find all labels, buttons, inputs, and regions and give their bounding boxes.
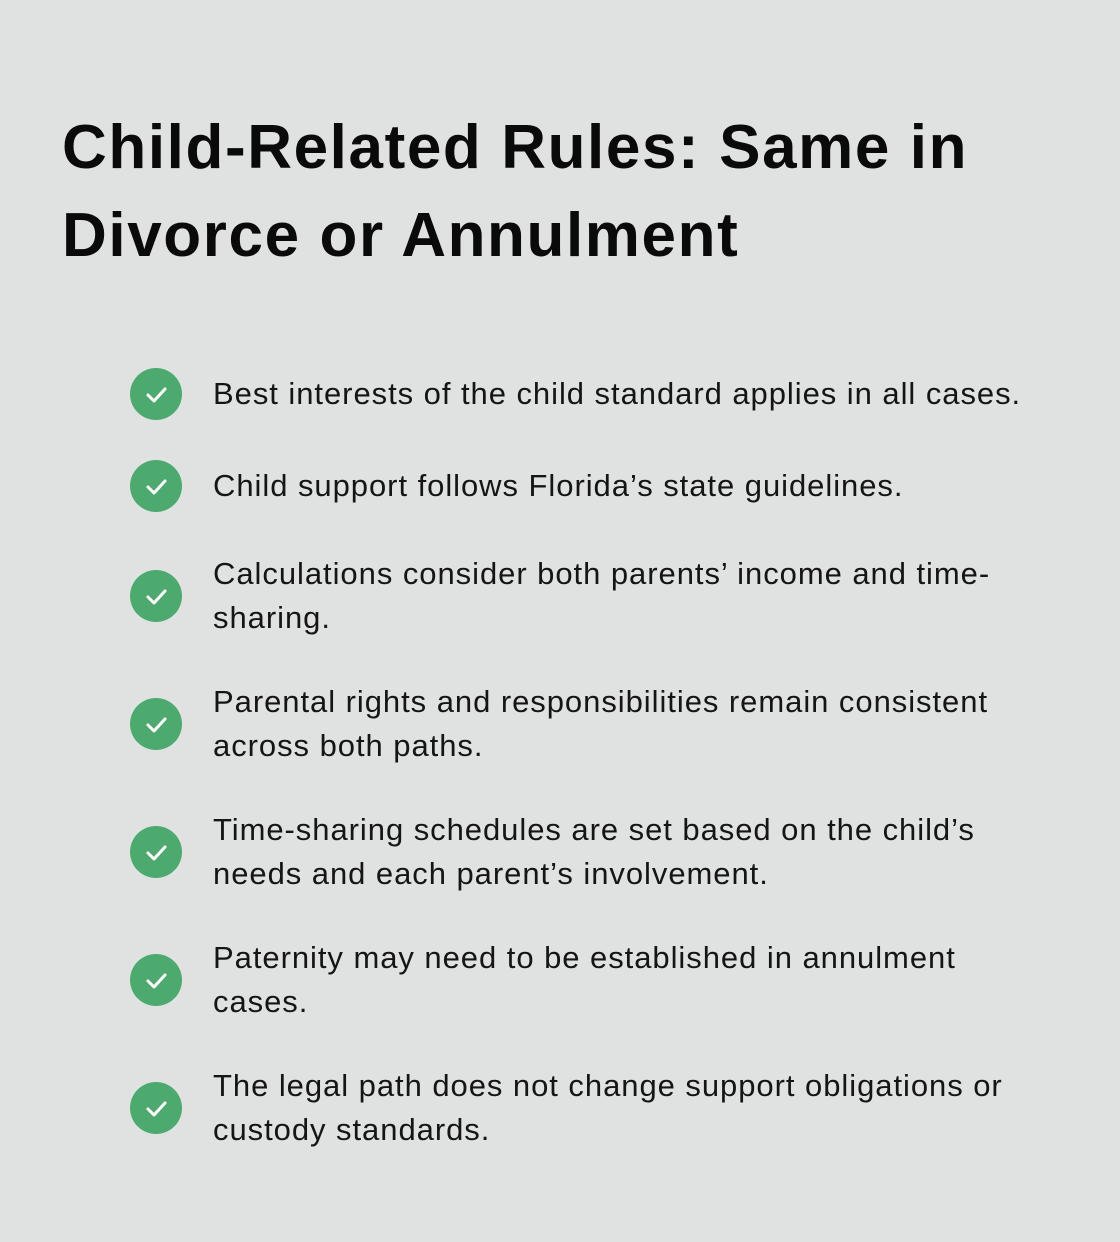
title: Divorce or Annulment [62,201,739,270]
item 4: across both paths. [213,728,483,763]
item 7 [130,1068,1003,1147]
title [62,113,968,270]
item 5: Time-sharing schedules are set based on the child’s [213,812,975,847]
item 4 [130,684,988,763]
item 5: needs and each parent’s involvement. [213,856,769,891]
item 5 [130,812,975,891]
item 6: Paternity may need to be established in annulment [213,940,956,975]
item 1: Best interests of the child standard applies in all cases. [213,376,1021,411]
item 4: Parental rights and responsibilities remain consistent [213,684,988,719]
item 6 [130,940,956,1019]
item 2 [130,460,903,512]
item 7: custody standards. [213,1112,490,1147]
item 3 [130,556,990,635]
item 1 [130,368,1021,420]
item 2: Child support follows Florida’s state guidelines. [213,468,903,503]
item 7: The legal path does not change support obligations or [213,1068,1003,1103]
item 3: sharing. [213,600,331,635]
item 3: Calculations consider both parents’ income and time- [213,556,990,591]
item 6: cases. [213,984,308,1019]
title: Child-Related Rules: Same in [62,113,968,182]
